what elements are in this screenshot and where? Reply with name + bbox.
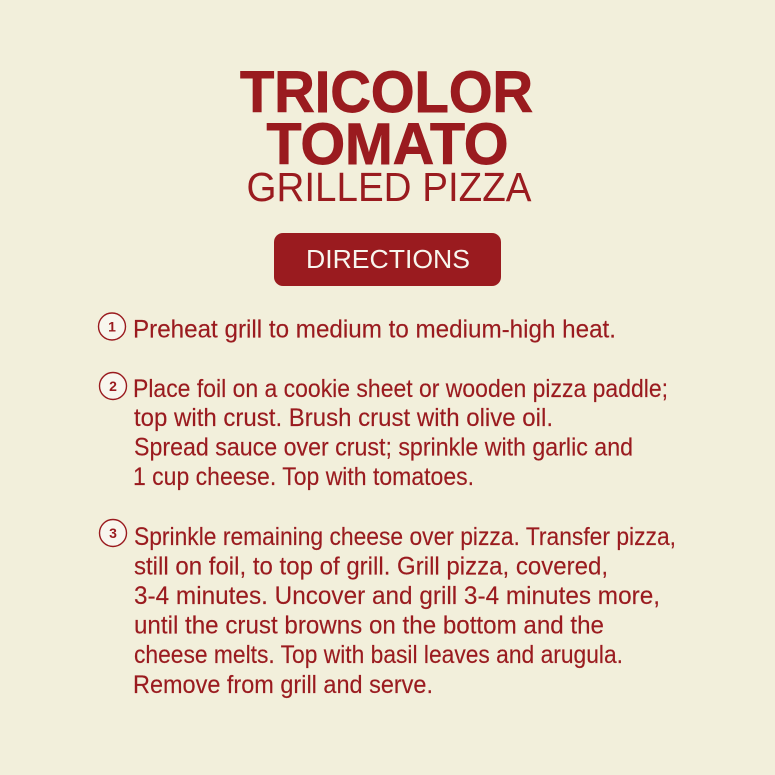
step 3 text: Remove from grill and serve. xyxy=(133,671,433,699)
step 1 text: Preheat grill to medium to medium-high heat. xyxy=(133,316,616,344)
step 3 text xyxy=(133,523,676,699)
step 1 number: 1 xyxy=(108,318,116,334)
title line: tomato: TOMATO xyxy=(266,112,508,177)
title xyxy=(240,60,533,210)
step 3 text: 3-4 minutes. Uncover and grill 3-4 minutes more, xyxy=(134,582,660,610)
step 3 text: Sprinkle remaining cheese over pizza. Transfer pizza, xyxy=(134,523,676,551)
step 2 text: 1 cup cheese. Top with tomatoes. xyxy=(133,463,474,491)
step 1 number xyxy=(98,313,126,340)
step 3 text: still on foil, to top of grill. Grill pizza, covered, xyxy=(134,552,608,580)
step 1 xyxy=(98,313,616,344)
step 3 xyxy=(100,520,676,699)
step 3 text: until the crust browns on the bottom and the xyxy=(134,612,604,640)
step 2 text xyxy=(133,375,668,491)
step 3 number: 3 xyxy=(109,525,117,541)
step 2 text: Place foil on a cookie sheet or wooden pizza paddle; xyxy=(133,375,668,403)
step 3 text: cheese melts. Top with basil leaves and arugula. xyxy=(134,641,623,669)
step 2 xyxy=(100,372,668,491)
step 2 number: 2 xyxy=(109,378,117,394)
directions badge xyxy=(274,233,501,286)
subtitle: GRILLED PIZZA xyxy=(246,164,532,210)
title line: tricolor: TRICOLOR xyxy=(240,60,533,125)
directions badge: DIRECTIONS xyxy=(306,246,470,274)
step 2 number xyxy=(100,372,126,400)
step 3 number xyxy=(100,520,126,546)
step 2 text: top with crust. Brush crust with olive oil. xyxy=(134,404,553,432)
step 2 text: Spread sauce over crust; sprinkle with garlic and xyxy=(134,434,633,462)
